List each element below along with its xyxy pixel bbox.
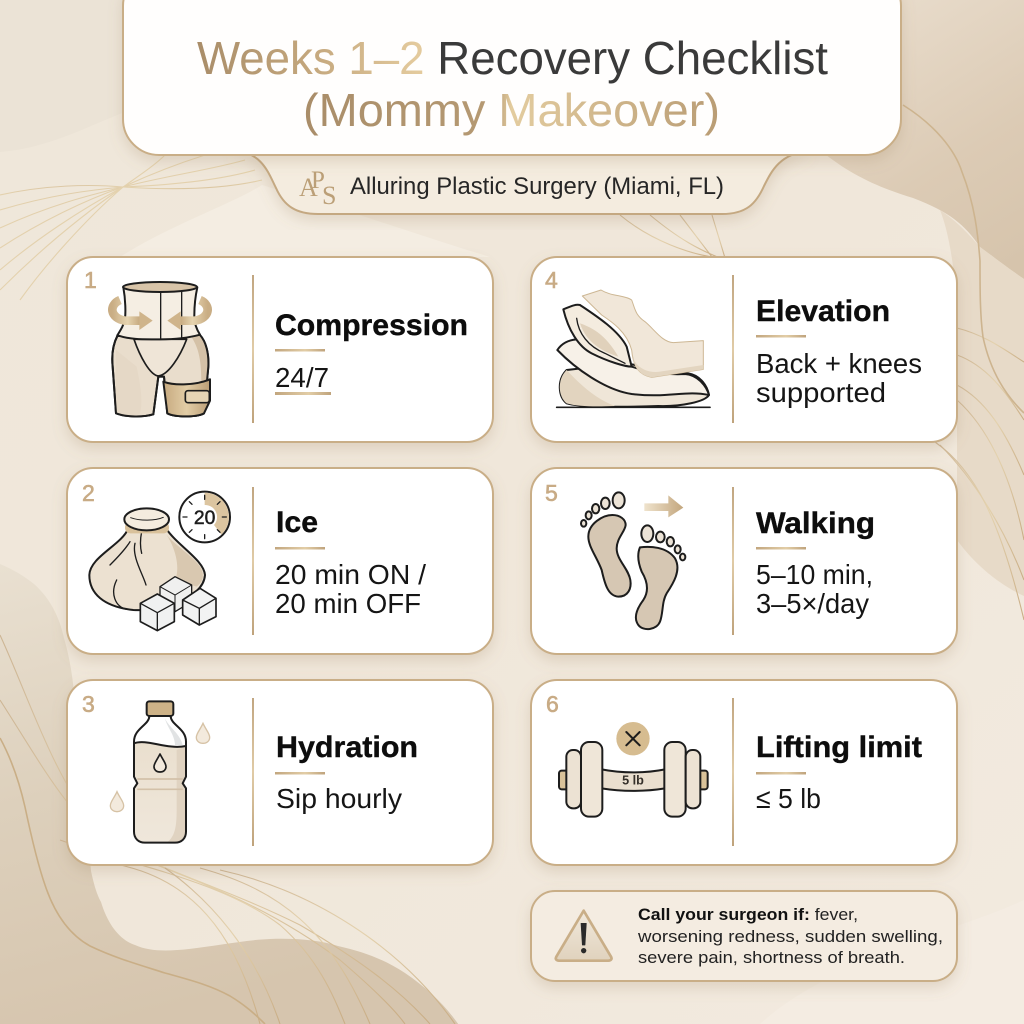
panel: 1 compression: 24/7 [275,362,329,393]
icon: stacked pillows [557,290,710,407]
icon: water bottle [110,701,210,843]
callout: warning [531,891,957,981]
panel: 5 walking: 5–10 min, [756,559,873,590]
panel: 1 compression: Compression [275,309,468,342]
title [197,32,828,136]
panel: 5 walking: 3–5×/day [756,588,869,619]
panel: 6 lifting limit: ≤ 5 lb [756,783,821,814]
icon: APS logo: S [322,181,336,210]
panel: 3 hydration: Hydration [276,731,418,764]
title: Weeks 1–2 Recovery Checklist [197,32,828,84]
panel: 2 ice: 2 [82,480,95,506]
icon: APS logo [299,167,336,210]
toes [581,492,685,560]
brand name: Alluring Plastic Surgery (Miami, FL) [350,173,724,200]
warning text: Call your surgeon if: fever, [638,905,858,924]
icon: APS logo: P [311,167,325,194]
warning text: worsening redness, sudden swelling, [637,927,943,946]
feet soles [588,515,677,629]
header panel [123,0,901,214]
panel: 3 hydration: Sip hourly [276,783,402,814]
icon: APS logo: A [299,173,318,202]
panel: 4 elevation [531,257,957,442]
panel: 5 walking: 5 [545,480,558,506]
panel: 3 hydration [67,680,493,865]
panel: 6 lifting limit [531,680,957,865]
panel: 6 lifting limit: Lifting limit [756,731,922,764]
arrow [644,495,683,517]
no symbol [616,722,650,755]
panel: 2 ice: 20 min OFF [275,588,421,619]
icon: dumbbell with 5 lb limit: 5 lb [622,774,644,788]
icon: footprints and arrow [581,492,685,629]
timer: 20 [194,508,215,529]
title: (Mommy Makeover) [303,84,720,136]
panel: 4 elevation: Back + knees [756,348,922,379]
water drops [196,723,210,743]
panel: 4 elevation: supported [756,377,886,408]
panel: 4 elevation: Elevation [756,295,890,328]
panel: 2 ice: Ice [276,506,318,539]
icon: ice bag and timer [89,492,230,631]
icon: dumbbell with 5 lb limit [559,722,708,817]
arrow: inward left [112,300,153,330]
icon: compression garment [112,282,210,416]
panel: 1 compression [67,257,493,442]
panel: 5 walking: Walking [756,507,875,540]
panel: 4 elevation: 4 [545,267,558,293]
panel: 1 compression: 1 [84,267,97,293]
panel: 3 hydration: 3 [82,691,95,717]
panel: 2 ice: 20 min ON / [275,559,426,590]
subtitle tab [232,150,810,214]
panel: 2 ice [67,468,493,654]
ice cubes [140,577,216,631]
timer [179,492,230,542]
icon: warning triangle [556,911,612,961]
panel: 5 walking [531,468,957,654]
panel: 6 lifting limit: 6 [546,691,559,717]
arrow: inward right [167,300,208,330]
warning text [637,905,943,967]
warning text: severe pain, shortness of breath. [638,948,905,967]
